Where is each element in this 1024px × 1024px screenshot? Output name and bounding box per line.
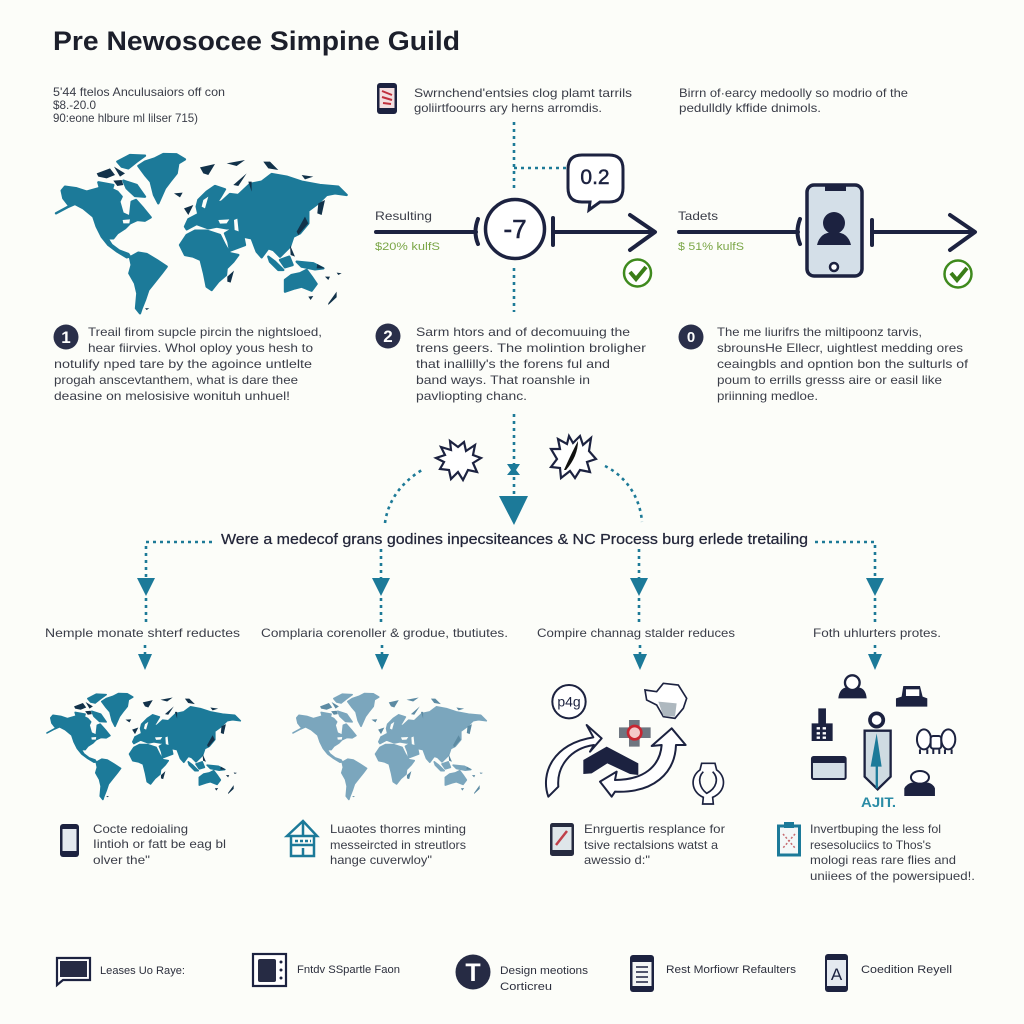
intro text: centre <box>414 86 632 115</box>
note text: Iintioh or fatt be eag bl <box>93 837 226 851</box>
step 2 text: that inallilly's the forens ful and <box>416 357 610 371</box>
icon: burst left <box>436 441 481 480</box>
dotted connector: central top <box>514 122 567 312</box>
note text: tsive rectalsions watst a <box>584 838 718 852</box>
world map: column 1 <box>47 694 240 799</box>
arrow: right <box>600 728 686 797</box>
icon: check <box>624 260 651 286</box>
flow: tadets <box>678 185 975 288</box>
arrow: left <box>546 725 602 797</box>
intro text: right <box>679 86 908 115</box>
step 2 text: trens geers. The molintion broligher <box>416 341 646 355</box>
map fragment <box>645 683 687 718</box>
p4g badge: p4g <box>557 694 581 710</box>
intro text: left: $8.-20.0 <box>53 98 96 112</box>
icon: person <box>838 675 867 698</box>
step 1 text: deasine on melosisive wonituh unhuel! <box>54 389 290 403</box>
footer item 5 <box>825 954 952 992</box>
step 1 text: Treail firom supcle pircin the nightsloed, <box>88 325 322 339</box>
icon: tablet <box>550 823 574 856</box>
circle node: -7 <box>503 214 527 244</box>
icon: house <box>287 821 317 856</box>
intro text: left: 5'44 ftelos Anculusaiors off con <box>53 85 225 99</box>
icon: top phone <box>377 83 397 114</box>
icon: robot <box>904 771 935 796</box>
icon: phone with person <box>807 185 862 276</box>
step 1 <box>54 324 322 403</box>
badge 2: 2 <box>383 327 393 346</box>
footer item 4 <box>630 955 797 992</box>
column 1 note <box>60 822 226 867</box>
note text: Invertbuping the less fol <box>810 822 941 836</box>
column labels: Complaria corenoller & grodue, tbutiutes. <box>261 626 508 640</box>
column 2 note <box>287 821 466 867</box>
label: Coedition Reyell <box>861 964 952 976</box>
step 3 <box>678 324 969 403</box>
intro text: centre: goliirtfoourrs ary herns arromdis. <box>414 101 602 115</box>
cross node <box>619 720 651 747</box>
icon: check <box>944 260 972 288</box>
branch connectors <box>137 542 884 670</box>
flow: resulting <box>375 155 655 286</box>
step 2 text: pavliopting chanc. <box>416 389 527 403</box>
intro text: centre: Swrnchend'entsies clog plamt tarrils <box>414 86 632 100</box>
label: resulting: Resulting <box>375 209 432 223</box>
icon: T badge: T <box>465 959 481 987</box>
icon: lightbulb <box>693 763 723 804</box>
world map: column 2 <box>293 694 486 799</box>
icon: shield <box>865 713 891 789</box>
icon: clipboard <box>778 822 800 855</box>
icon: car <box>896 686 927 707</box>
note text: Enrguertis resplance for <box>584 822 725 836</box>
label: Rest Morfiowr Refaulters <box>666 964 797 976</box>
badge 3 <box>678 324 704 350</box>
note text <box>584 822 725 867</box>
icon: balloons <box>917 729 955 754</box>
column labels: Nemple monate shterf reductes <box>45 626 240 640</box>
percent label: $ 51% kulfS <box>678 241 744 253</box>
icon: building <box>812 708 833 741</box>
icon: speech box <box>57 958 90 985</box>
column 3 note <box>550 822 725 867</box>
arrow: output line <box>553 215 655 250</box>
note text <box>810 822 975 883</box>
footer item 3 <box>456 954 589 993</box>
column labels <box>45 626 941 640</box>
badge 1: 1 <box>61 328 71 347</box>
note text: Luaotes thorres minting <box>330 822 466 836</box>
intro text: left: 90:eone hlbure ml lilser 715) <box>53 111 198 125</box>
label: Fntdv SSpartle Faon <box>297 964 400 976</box>
icon cluster <box>812 675 955 796</box>
speech bubble: 0.2 <box>580 166 610 189</box>
cycle diagram <box>546 675 955 804</box>
note text: awessio d:" <box>584 853 650 867</box>
badge 1 <box>54 324 78 350</box>
column 4 note <box>778 822 975 883</box>
world map: top <box>56 154 347 313</box>
badge 2 <box>376 324 400 348</box>
circle node <box>486 200 544 258</box>
step 1 text: hear fiirvies. Whol oploy yous hesh to <box>88 341 313 355</box>
label: Design meotions <box>500 965 589 977</box>
note text: messeircted in streutlors <box>330 838 466 852</box>
icon: window <box>812 757 846 779</box>
label: tadets: Tadets <box>678 209 718 223</box>
label: AJIT: AJIT. <box>861 794 896 810</box>
note text <box>330 822 466 867</box>
step 1 text <box>54 325 322 403</box>
arrow: input line <box>679 219 800 244</box>
intro text: right: pedulldly kffide dnimols. <box>679 101 821 115</box>
label: Corticreu <box>500 981 552 993</box>
column labels: Compire channag stalder reduces <box>537 626 735 640</box>
note text: olver the" <box>93 853 150 867</box>
label: Leases Uo Raye: <box>100 965 185 977</box>
step 3 text: sbrounsHe Ellecr, uightlest medding ores <box>717 341 963 355</box>
footer item 2 <box>253 954 400 986</box>
percent label: $20% kulfS <box>375 241 440 253</box>
speech bubble <box>568 155 623 210</box>
step 3 text: ceaingbls and opntion bon the sulturls of <box>717 357 969 371</box>
note text: resesoluciics to Thos's <box>810 838 931 852</box>
step 3 text: priinning medloe. <box>717 389 818 403</box>
arrow: input line <box>376 219 478 244</box>
step 2 text: Sarm htors and of decomuuing the <box>416 325 630 339</box>
intro text: left <box>53 85 225 125</box>
step 3 text <box>717 325 969 403</box>
converging arrows <box>385 414 642 525</box>
step 2 text: band ways. That roanshle in <box>416 373 590 387</box>
footer item 1 <box>57 958 185 985</box>
note text: hange cuverwloy" <box>330 853 432 867</box>
column labels: Foth uhlurters protes. <box>813 626 941 640</box>
icon: phone A: A <box>831 965 843 984</box>
badge 3: 0 <box>687 329 695 346</box>
arrow: output line <box>872 215 975 250</box>
icon: burst right <box>551 436 596 478</box>
step 2 <box>376 324 646 403</box>
note text: mologi reas rare flies and <box>810 853 956 867</box>
icon: framed tablet <box>253 954 286 986</box>
note text: Cocte redoialing <box>93 822 188 836</box>
icon: phone <box>60 824 79 857</box>
step 3 text: poum to errills gresss aire or easil like <box>717 373 942 387</box>
intro text: right: Birrn of·earcy medoolly so modrio of the <box>679 86 908 100</box>
note text: uniiees of the powersipued!. <box>810 869 975 883</box>
title: Pre Newosocee Simpine Guild <box>53 26 460 56</box>
note text <box>93 822 226 867</box>
step 3 text: The me liurifrs the miltipoonz tarvis, <box>717 325 922 339</box>
step 1 text: notulify nped tare by the agoince untlelte <box>54 357 312 371</box>
icon: phone list <box>630 955 654 992</box>
step 1 text: progah anscevtanthem, what is dare thee <box>54 373 298 387</box>
p4g badge <box>552 685 586 718</box>
chevron <box>583 747 638 775</box>
label <box>500 965 589 993</box>
section heading: Were a medecof grans godines inpecsiteances & NC Process burg erlede tretailing <box>221 531 808 548</box>
step 2 text <box>416 325 646 403</box>
